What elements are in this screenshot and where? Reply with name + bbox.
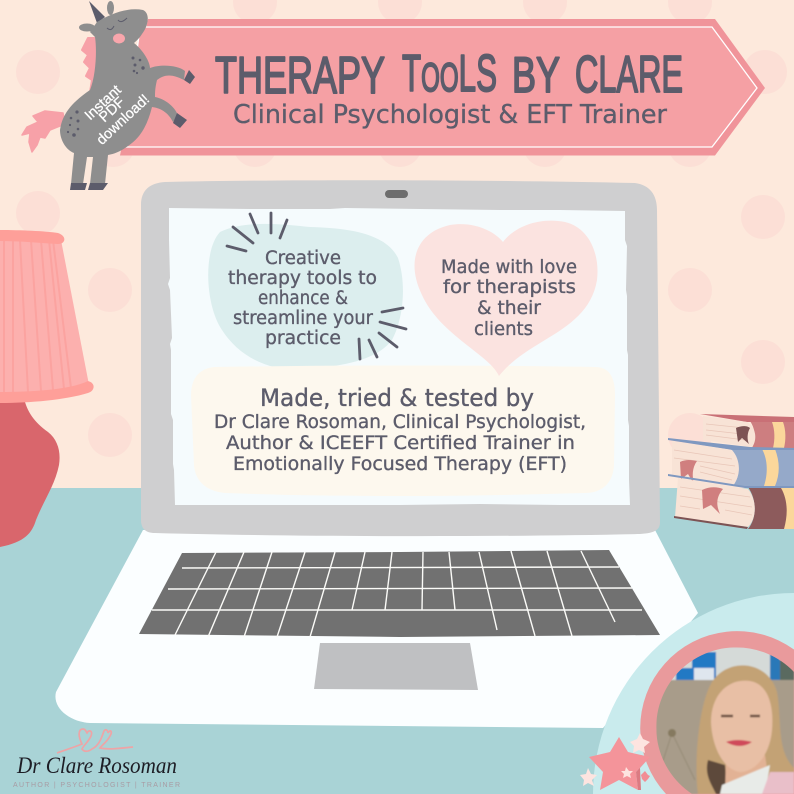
logo name: Dr Clare Rosoman: [16, 753, 177, 778]
star decoration: [580, 733, 650, 790]
screen: [168, 208, 630, 505]
logo tagline: AUTHOR | PSYCHOLOGIST | TRAINER: [13, 782, 180, 789]
desk: [0, 488, 794, 794]
logo: [13, 729, 180, 789]
text: made tried and tested: Emotionally Focused Therapy (EFT): [233, 453, 567, 475]
camera: [385, 190, 408, 198]
text: made with love: & their: [477, 297, 541, 319]
portrait: [593, 593, 794, 794]
instant PDF download text: Instant: [82, 82, 125, 124]
blue blob: [208, 224, 403, 370]
instant PDF download text: download!: [94, 92, 153, 148]
laptop lid: [141, 180, 660, 536]
title: BY: [512, 47, 560, 103]
text: creative tools: enhance &: [258, 288, 348, 309]
text: made with love: clients: [474, 318, 533, 340]
keyboard: [139, 550, 660, 637]
title: TOOLS: [402, 45, 497, 103]
text: creative tools: streamline your: [233, 308, 373, 329]
cream box: [191, 366, 615, 496]
text: made tried and tested: [214, 384, 586, 475]
logo hearts: [57, 729, 133, 753]
text: made with love: [441, 256, 577, 340]
laptop base: [55, 530, 698, 728]
text: made tried and tested: Made, tried & tested by: [260, 384, 534, 412]
text: creative tools: [228, 248, 377, 349]
touchpad: [314, 643, 478, 690]
text: made tried and tested: Dr Clare Rosoman, Clinical Psychologist,: [214, 411, 586, 433]
book: middle: [668, 438, 794, 486]
unicorn: [22, 1, 195, 190]
sunburst top: [227, 213, 287, 251]
book: bottom: [668, 474, 794, 529]
lamp: [0, 230, 94, 547]
instant PDF download text: PDF: [96, 94, 128, 126]
text: made with love: Made with love: [441, 256, 577, 278]
banner: [120, 19, 765, 156]
text: creative tools: Creative: [265, 248, 341, 269]
text: made with love: for therapists: [443, 276, 576, 298]
subtitle: Clinical Psychologist & EFT Trainer: [233, 100, 667, 130]
laptop: [55, 180, 698, 728]
sunburst bottom: [359, 308, 406, 359]
book: top: [700, 414, 794, 448]
text: creative tools: therapy tools to: [228, 268, 377, 289]
heart: [415, 221, 598, 376]
text: made tried and tested: Author & ICEEFT Certified Trainer in: [226, 432, 575, 454]
title: THERAPY: [215, 47, 385, 105]
title: CLARE: [575, 46, 683, 104]
books: [668, 414, 794, 529]
title: [215, 45, 683, 105]
text: creative tools: practice: [265, 328, 341, 349]
